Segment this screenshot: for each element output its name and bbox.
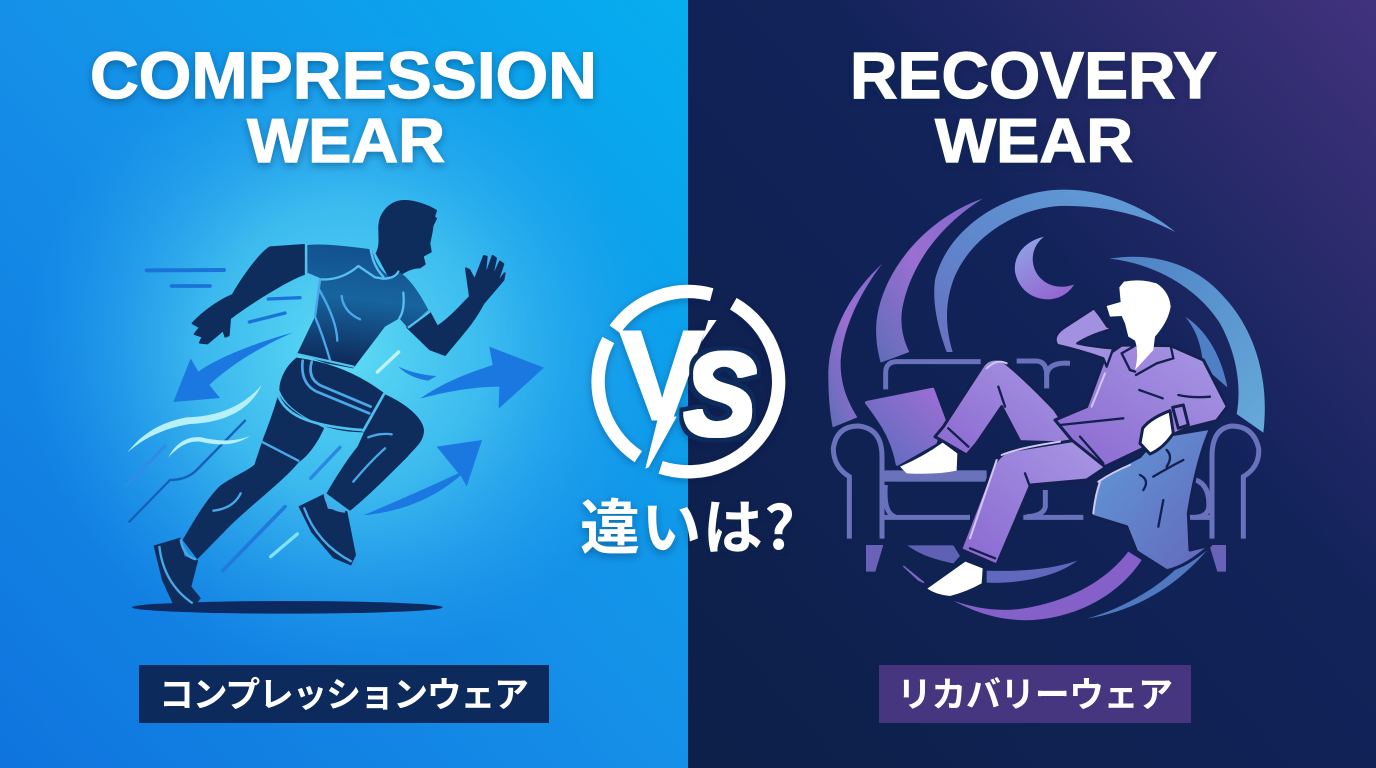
foot lower bbox=[927, 562, 983, 596]
front leg bbox=[327, 395, 423, 510]
shorts bbox=[280, 358, 383, 432]
sofa legs bbox=[866, 545, 1226, 572]
shirt seams bbox=[297, 245, 429, 367]
moon bbox=[1015, 237, 1074, 299]
pajama highlights bbox=[970, 362, 1130, 538]
foot raised bbox=[900, 443, 957, 474]
runner figure bbox=[154, 201, 505, 605]
illustration: man relaxing on a sofa bbox=[828, 190, 1265, 620]
shorts stripes bbox=[277, 361, 384, 431]
heading: compression wear: WEAR bbox=[247, 107, 445, 176]
pillow bbox=[867, 389, 944, 464]
pajama details bbox=[948, 313, 1210, 558]
ring arcs bbox=[598, 292, 779, 472]
back arm bbox=[193, 245, 304, 343]
heading: recovery wear: WEAR bbox=[935, 107, 1133, 176]
arrow: right lower bbox=[363, 440, 482, 515]
panel: compression background bbox=[0, 0, 688, 768]
front shoe bbox=[299, 495, 355, 565]
raised arm bbox=[1055, 308, 1113, 367]
figure in pajamas bbox=[900, 280, 1227, 596]
label: compression wear in Japanese: コンプレッションウェア bbox=[159, 667, 529, 718]
rear leg bbox=[183, 395, 323, 558]
near hand bbox=[1140, 411, 1173, 454]
heading: recovery wear: RECOVERY bbox=[850, 38, 1217, 112]
heading: compression wear: COMPRESSION bbox=[90, 38, 597, 112]
heading: compression wear bbox=[90, 38, 597, 176]
swirl crescents bbox=[828, 190, 1265, 620]
lightning slash bbox=[645, 293, 727, 469]
streak: small dart bbox=[398, 367, 437, 381]
torso bbox=[1055, 345, 1227, 467]
V letter: V bbox=[620, 305, 704, 446]
ground shadow bbox=[132, 601, 443, 614]
compression shirt bbox=[297, 245, 428, 368]
shoe accents bbox=[159, 495, 352, 603]
head bbox=[377, 201, 436, 278]
front arm and hand bbox=[407, 256, 505, 355]
label: recovery wear in Japanese: リカバリーウェア bbox=[897, 667, 1173, 718]
leg highlights bbox=[213, 434, 392, 511]
waves bbox=[127, 385, 262, 457]
sofa bbox=[833, 361, 1259, 539]
cuff near sleeve bbox=[1173, 405, 1188, 428]
illustration: runner with motion arrows bbox=[126, 201, 544, 614]
rear shoe bbox=[154, 538, 200, 605]
S letter: S bbox=[684, 329, 756, 461]
arrow: right upper bbox=[420, 347, 544, 409]
blanket bbox=[1092, 428, 1211, 571]
text: question 違いは?: 違いは? bbox=[580, 480, 795, 567]
raised leg bbox=[935, 359, 1077, 455]
badge: VS emblem bbox=[598, 292, 779, 472]
lower leg bbox=[961, 440, 1107, 565]
heading: recovery wear bbox=[850, 38, 1217, 176]
head and neck bbox=[1107, 280, 1171, 370]
arrow: left bbox=[173, 332, 293, 402]
motion streaks bbox=[126, 270, 399, 571]
panel: recovery background bbox=[688, 0, 1376, 768]
